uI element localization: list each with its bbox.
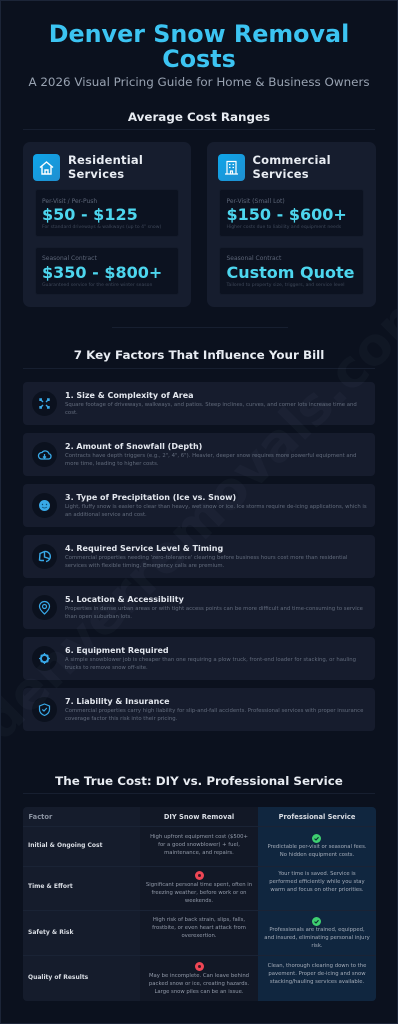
factor 1: Square footage of driveways, walkways, and patios. Steep inclines, curves, and corner lots increase time and	[65, 402, 357, 408]
panel: commercial services	[207, 142, 376, 307]
factor 7: coverage factor this risk into their pricing.	[65, 716, 177, 722]
icon: building	[218, 154, 245, 180]
commercial heading: Services	[252, 166, 309, 180]
text: Significant personal time spent, often in	[146, 882, 252, 888]
text: pavement. Proper de-icing and snow	[268, 970, 366, 976]
price box: per-visit small lot: $150 - $600+	[226, 205, 347, 224]
commercial heading: Commercial	[252, 153, 331, 167]
factor 1: 1. Size & Complexity of Area	[65, 390, 194, 400]
factor 4: services with flexible timing. Emergency calls are premium.	[65, 562, 224, 568]
icon: red x	[195, 871, 204, 880]
factor 2	[23, 433, 375, 476]
icon: face	[32, 493, 57, 518]
text: Predictable per-visit or seasonal fees.	[267, 844, 367, 850]
title	[49, 20, 349, 73]
icon: green check	[312, 917, 321, 926]
factor 2: Contracts have depth triggers (e.g., 2", 4", 6"). Heavier, deeper snow requires more powerful equipment and	[65, 452, 356, 458]
factor 3: an additional service and cost.	[65, 512, 147, 518]
text: Clean, thorough clearing down to the	[268, 962, 366, 968]
icon: house	[33, 154, 60, 180]
price box: per-visit small lot: Higher costs due to liability and equipment needs	[226, 225, 341, 230]
text: No hidden equipment costs.	[280, 852, 354, 858]
factor 5	[23, 586, 375, 629]
text: for a good snowblower) + fuel,	[158, 842, 240, 848]
text: freezing weather, before work or on	[151, 890, 247, 896]
factor 3	[23, 484, 375, 527]
price box: per-visit small lot: Per-Visit (Small Lot)	[226, 198, 285, 204]
heading: key factors: 7 Key Factors That Influence Your Bill	[74, 348, 324, 362]
text: weekends.	[185, 898, 213, 904]
icon: green check	[312, 834, 321, 843]
price box: custom quote: Seasonal Contract	[226, 254, 281, 262]
icon: location pin	[32, 595, 57, 620]
heading: average cost ranges: Average Cost Ranges	[128, 110, 270, 124]
factor 4: 4. Required Service Level & Timing	[65, 544, 223, 552]
price box: seasonal contract: $350 - $800+	[42, 262, 162, 282]
price box: per-visit: For standard driveways & walkways (up to 4" snow)	[42, 225, 161, 230]
subtitle: A 2026 Visual Pricing Guide for Home & Business Owners	[28, 74, 370, 88]
text: packed snow or ice, creating hazards.	[149, 981, 249, 987]
text: Your time is saved. Service is	[278, 871, 356, 877]
row: initial cost: Initial & Ongoing Cost	[28, 842, 102, 849]
residential heading: Services	[68, 166, 124, 180]
text: performed efficiently while you stay	[269, 879, 365, 885]
price box: custom quote: Tailored to property size, triggers, and service level	[226, 282, 345, 288]
factor 5: than open suburban lots.	[65, 614, 132, 620]
factor 1	[23, 382, 375, 425]
price box: seasonal contract	[35, 246, 179, 295]
factor 7: Commercial properties carry high liability for slip-and-fall accidents. Professional services with proper insurance	[65, 708, 363, 714]
comparison table	[23, 807, 376, 1001]
factor 3: 3. Type of Precipitation (Ice vs. Snow)	[65, 492, 236, 502]
factor 7	[23, 688, 375, 731]
factor 4	[23, 535, 375, 578]
table header: Factor	[28, 813, 52, 821]
price box: per-visit: Per-Visit / Per-Push	[42, 198, 97, 204]
price box: seasonal contract: Seasonal Contract	[42, 254, 97, 262]
price box: seasonal contract: Guaranteed service for the entire winter season	[42, 282, 152, 288]
residential heading: Residential	[68, 153, 143, 167]
panel: residential services	[23, 142, 191, 307]
icon: cloud	[32, 442, 57, 467]
professional column	[258, 807, 376, 1001]
factor 6	[23, 637, 375, 680]
title: Costs	[162, 45, 236, 73]
text: frostbite, or even heart attack from	[152, 924, 246, 930]
row: safety and risk: Safety & Risk	[28, 929, 73, 936]
icon: shield	[32, 697, 57, 722]
text: High risk of back strain, slips, falls,	[153, 916, 245, 922]
factor 6: trucks to remove snow off-site.	[65, 664, 148, 670]
icon: gear	[32, 646, 57, 671]
text: May be incomplete. Can leave behind	[149, 973, 249, 979]
factor 7: 7. Liability & Insurance	[65, 696, 170, 706]
price box: custom quote: Custom Quote	[226, 262, 355, 282]
icon: expand arrows	[32, 391, 57, 416]
text: and insured, eliminating personal injury	[264, 935, 370, 941]
factor 3: Light, fluffy snow is easier to clear than heavy, wet snow or ice. Ice storms require de-icing applications, which is	[65, 504, 367, 510]
comparison table: Professional Service	[279, 813, 355, 821]
text: risk.	[311, 943, 323, 949]
residential heading	[68, 153, 143, 180]
price box: per-visit: $50 - $125	[42, 205, 138, 224]
text: warm and focus on other priorities.	[270, 887, 364, 893]
price box: custom quote	[219, 246, 364, 295]
factor 5: Properties in dense urban areas or with tight access points can be more difficult and time-consuming to service	[65, 606, 363, 612]
row: quality of results: Quality of Results	[28, 974, 88, 981]
factor 2: 2. Amount of Snowfall (Depth)	[65, 442, 202, 450]
factor column	[23, 807, 140, 1001]
price box: per-visit small lot	[219, 189, 364, 237]
factor 2: more time, leading to higher costs.	[65, 460, 159, 466]
icon: timing chart	[32, 544, 57, 569]
price box: per-visit	[35, 189, 179, 237]
factor 5: 5. Location & Accessibility	[65, 594, 184, 604]
text: High upfront equipment cost ($500+	[150, 834, 248, 840]
title: Denver Snow Removal	[49, 20, 349, 48]
row: time and effort: Time & Effort	[28, 883, 73, 890]
icon: red x	[195, 962, 204, 971]
commercial heading	[252, 153, 331, 180]
comparison table: DIY Snow Removal	[164, 813, 234, 821]
factor 1: cost.	[65, 410, 78, 416]
text: stacking/hauling services available.	[270, 978, 364, 984]
text: maintenance, and repairs.	[164, 850, 234, 856]
heading: diy vs professional: The True Cost: DIY vs. Professional Service	[55, 774, 343, 788]
factor 4: Commercial properties needing 'zero-tolerance' clearing before business hours cost more than residential	[65, 554, 347, 560]
factor 6: 6. Equipment Required	[65, 646, 169, 654]
text: Large snow piles can be an issue.	[154, 989, 244, 995]
text: overexertion.	[181, 932, 217, 938]
factor 6: A simple snowblower job is cheaper than one requiring a plow truck, front-end loader for stacking, or hauling	[65, 656, 356, 662]
text: Professionals are trained, equipped,	[269, 927, 365, 933]
